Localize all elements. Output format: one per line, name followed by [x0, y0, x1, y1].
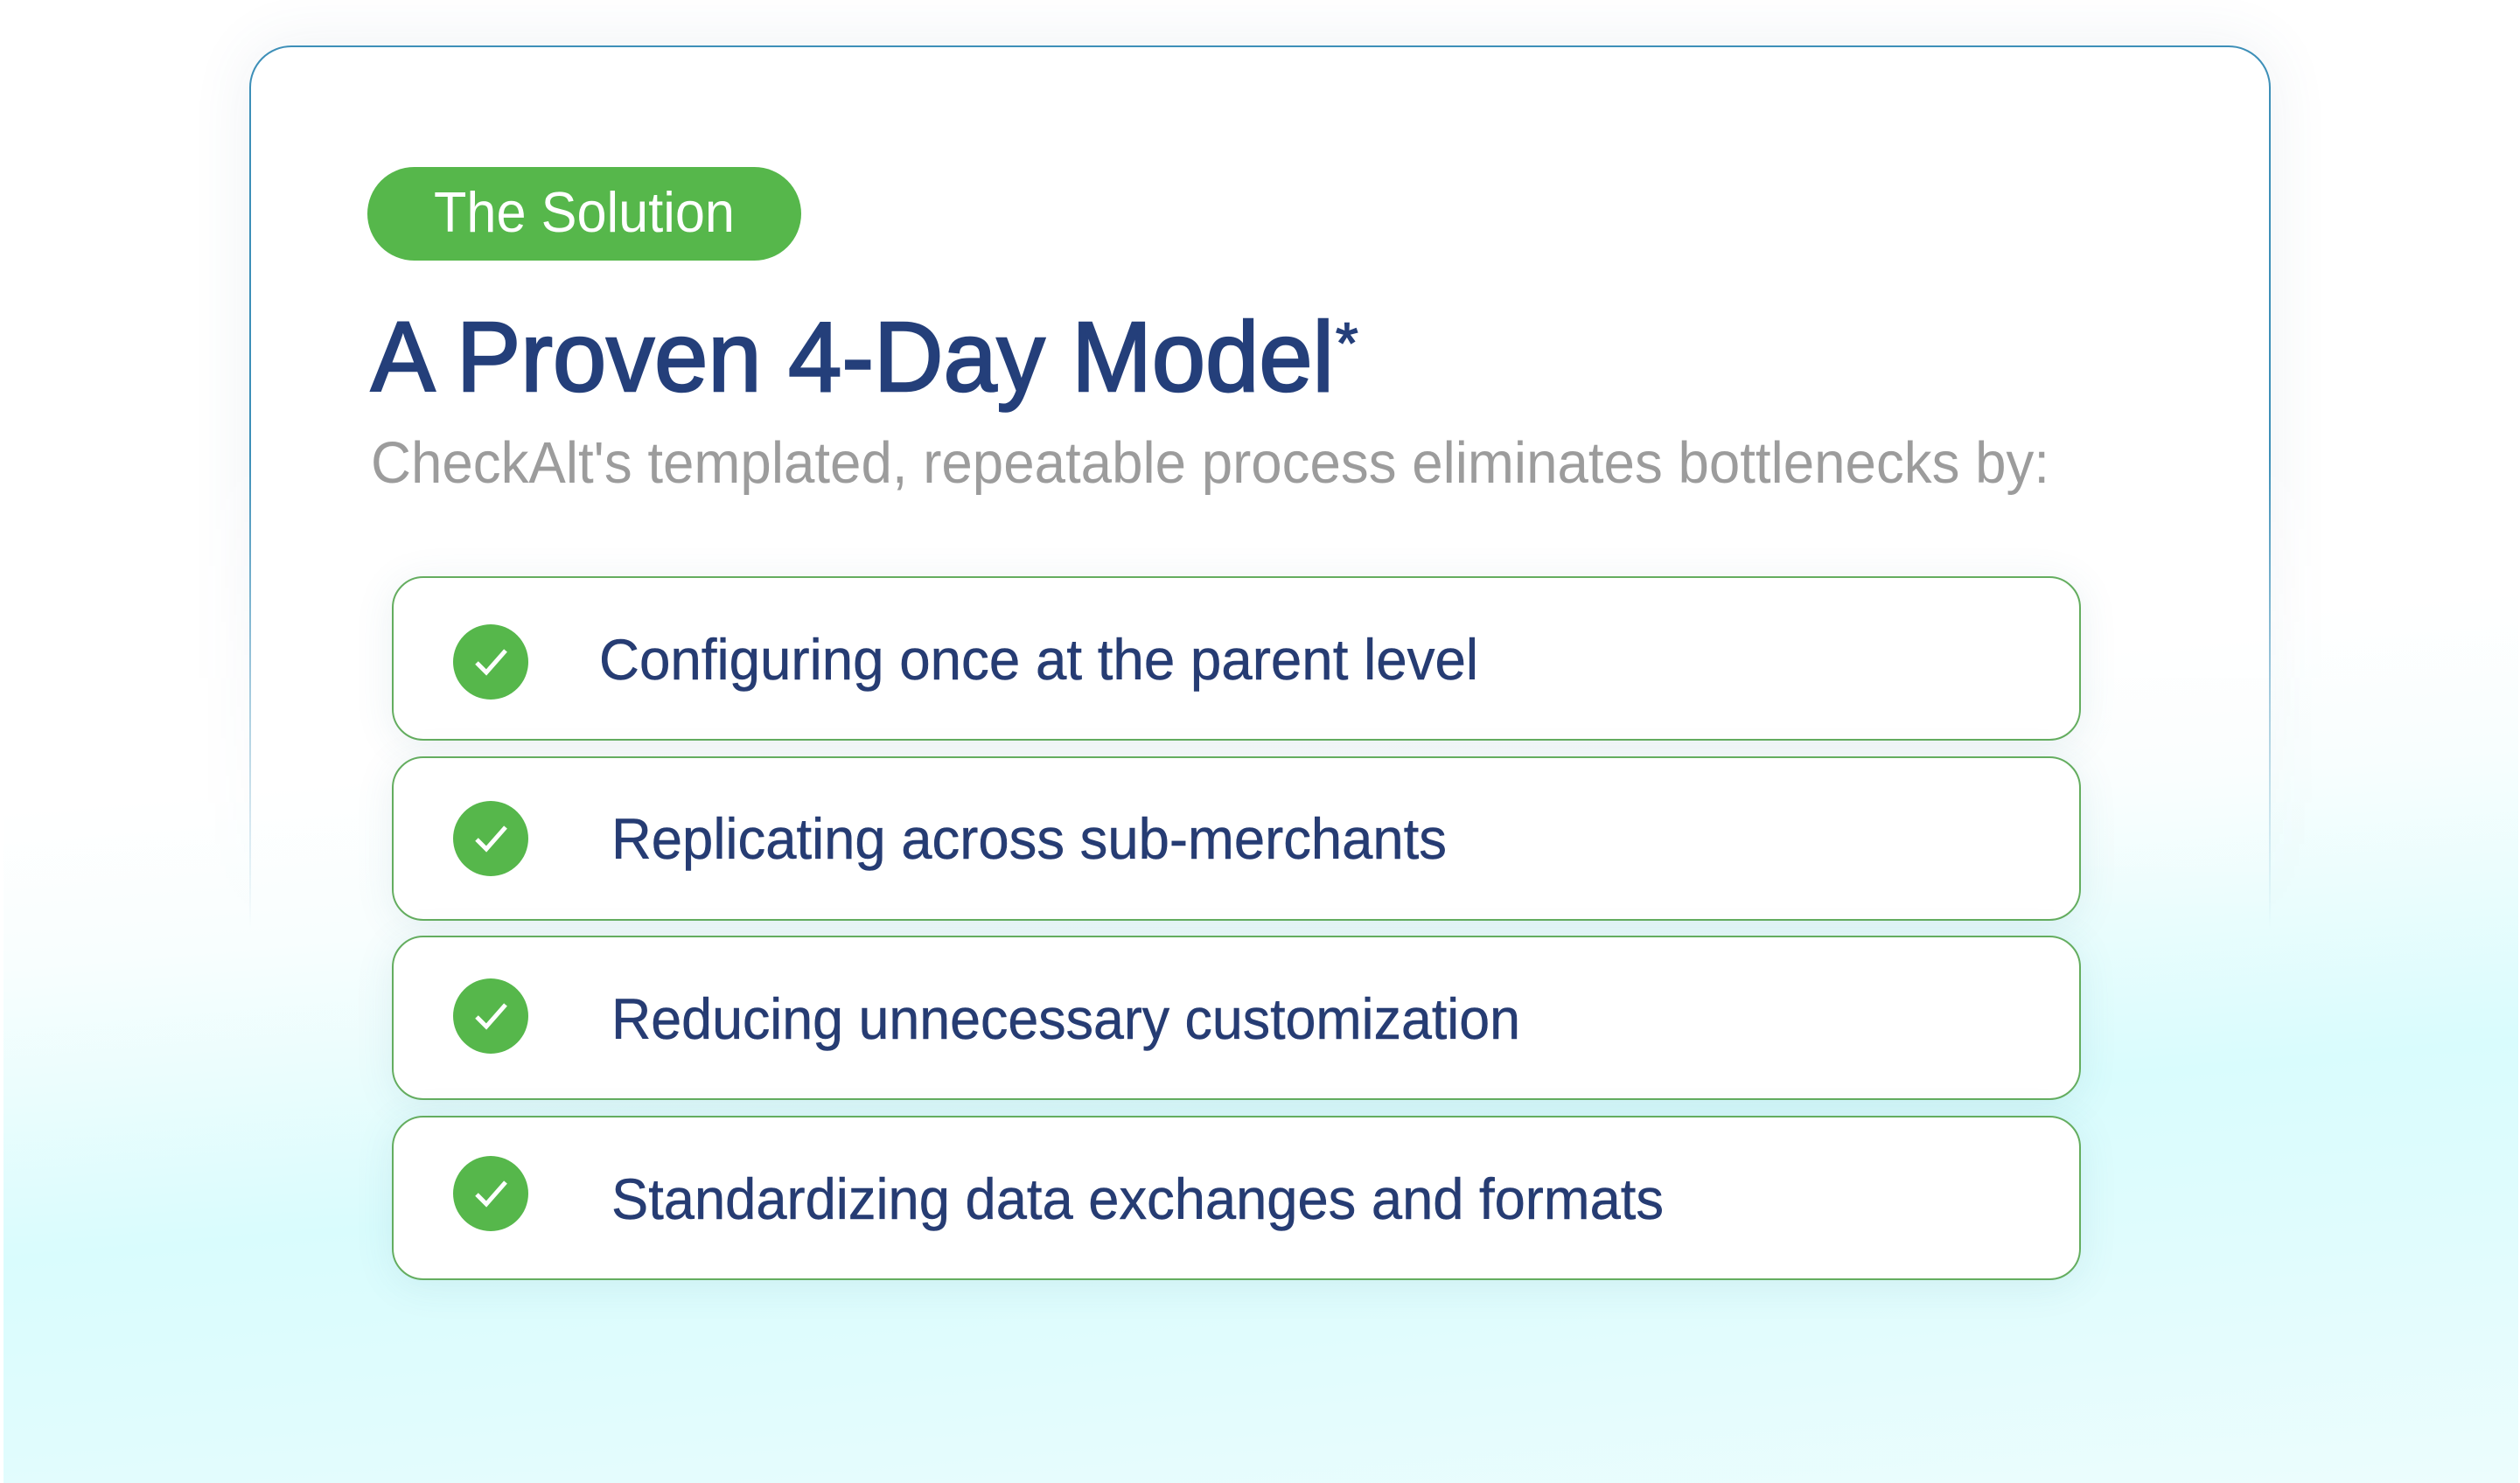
subtitle: CheckAlt's templated, repeatable process eliminates bottlenecks by: — [371, 430, 2049, 496]
row text: Reducing unnecessary customization — [611, 986, 1520, 1051]
title: * — [1336, 310, 1358, 375]
badge: The Solution: The Solution — [434, 180, 735, 244]
list row: replicating — [392, 756, 2081, 921]
badge: The Solution — [367, 167, 801, 261]
list row: standardizing — [392, 1116, 2081, 1280]
icon: check circle — [453, 978, 528, 1054]
icon: check circle — [453, 801, 528, 876]
row text: Standardizing data exchanges and formats — [611, 1166, 1664, 1231]
title: A Proven 4-Day Model — [371, 302, 1334, 412]
row text: Configuring once at the parent level — [599, 627, 1478, 692]
icon: check circle — [453, 1156, 528, 1231]
panel: outer card outline — [248, 44, 2272, 906]
list row: configuring — [392, 576, 2081, 741]
icon: check circle — [453, 624, 528, 700]
list row: reducing — [392, 936, 2081, 1100]
row text: Replicating across sub-merchants — [611, 806, 1447, 871]
